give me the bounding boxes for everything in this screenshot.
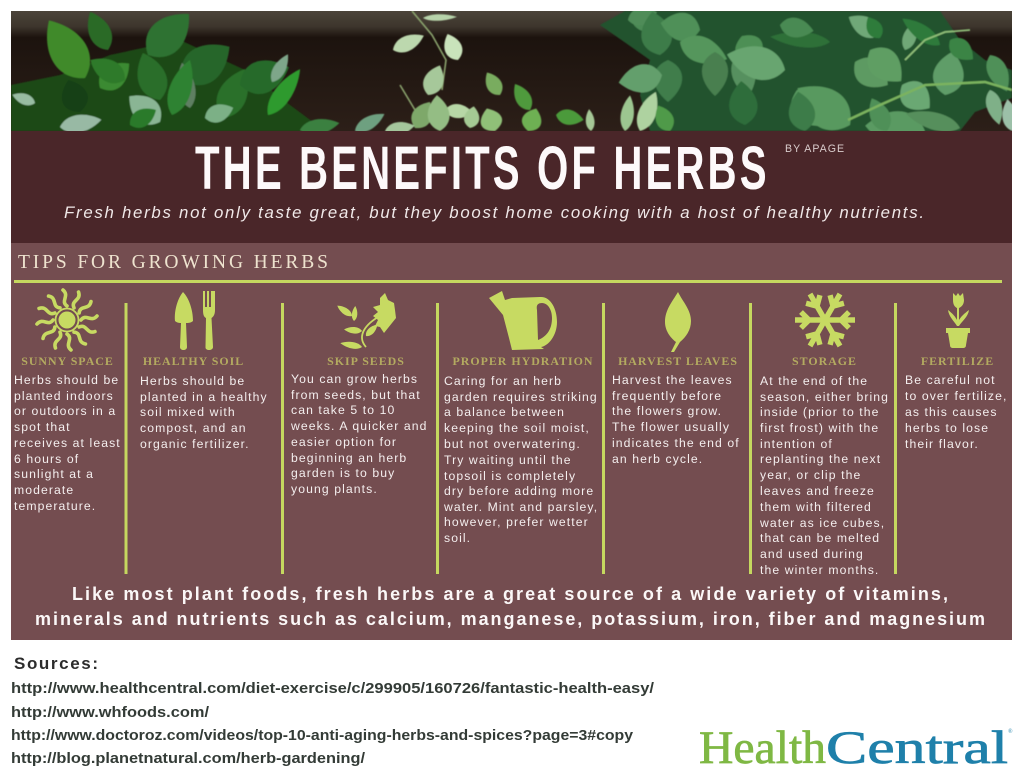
text: [612, 373, 740, 466]
text: herbs to lose: [905, 421, 989, 435]
photo banner: fresh herbs: [11, 11, 1012, 131]
text: [290, 372, 428, 496]
column: harvest leaves: [612, 292, 740, 466]
summary text: Like most plant foods, fresh herbs are a great source of a wide variety of vitamins,: [72, 584, 948, 604]
logo: HealthCentral: [699, 722, 1013, 774]
text: inside (prior to the: [760, 405, 880, 419]
text: from seeds, but that: [291, 388, 421, 402]
right catnip mass: [600, 11, 1012, 131]
text: year, or clip the: [760, 468, 861, 482]
logo: HealthCentral: Health: [699, 722, 826, 774]
text: a balance between: [444, 405, 565, 419]
sources list: http://www.whfoods.com/: [11, 704, 210, 721]
text: garden requires striking: [444, 390, 598, 404]
text: can take 5 to 10: [291, 403, 395, 417]
label: STORAGE: [792, 354, 857, 368]
text: Be careful not: [905, 373, 996, 387]
sources list: http://www.doctoroz.com/videos/top-10-anti-aging-herbs-and-spices?page=3#copy: [11, 727, 634, 744]
text: leaves and freeze: [760, 484, 875, 498]
text: dry before adding more: [444, 484, 594, 498]
text: compost, and an: [140, 421, 247, 435]
icon: leaf: [665, 292, 691, 352]
text: soil mixed with: [140, 405, 236, 419]
text: to over fertilize,: [905, 389, 1007, 403]
logo: HealthCentral: Central: [826, 722, 1008, 774]
text: however, prefer wetter: [444, 515, 589, 529]
text: 6 hours of: [14, 452, 79, 466]
label: FERTILIZE: [921, 354, 994, 368]
text: them with filtered: [760, 500, 872, 514]
text: easier option for: [291, 435, 397, 449]
text: [14, 373, 121, 513]
text: intention of: [760, 437, 833, 451]
column: fertilize: [905, 293, 1007, 451]
middle sprigs: [352, 11, 595, 137]
text: first frost) with the: [760, 421, 879, 435]
logo: HealthCentral: ®: [1008, 728, 1013, 735]
sources list: http://blog.planetnatural.com/herb-gardening/: [11, 750, 366, 767]
summary text: [35, 584, 985, 629]
label: HEALTHY SOIL: [143, 354, 244, 368]
column: skip seeds: [290, 293, 428, 496]
icon: sun: [37, 290, 97, 350]
text: weeks. A quicker and: [290, 419, 428, 433]
icon: potted tulip: [946, 293, 970, 348]
text: and used during: [760, 547, 864, 561]
label: SUNNY SPACE: [21, 354, 114, 368]
text: spot that: [14, 420, 71, 434]
text: The flower usually: [612, 420, 730, 434]
text: At the end of the: [760, 374, 868, 388]
text: sunlight at a: [14, 467, 94, 481]
label: PROPER HYDRATION: [453, 354, 593, 368]
text: temperature.: [14, 499, 96, 513]
text: replanting the next: [760, 452, 881, 466]
text: an herb cycle.: [612, 452, 703, 466]
text: [759, 374, 889, 577]
text: water. Mint and parsley,: [443, 500, 598, 514]
tips panel: [11, 243, 1012, 640]
text: the winter months.: [760, 563, 879, 577]
icon: trowel and fork: [175, 291, 215, 350]
text: [140, 374, 268, 451]
text: soil.: [444, 531, 471, 545]
text: indicates the end of: [612, 436, 740, 450]
title panel: [11, 131, 1012, 243]
text: their flavor.: [905, 437, 979, 451]
text: water as ice cubes,: [759, 516, 885, 530]
text: young plants.: [291, 482, 378, 496]
section heading: TIPS FOR GROWING HERBS: [18, 252, 328, 273]
byline: BY APAGE: [785, 143, 845, 155]
text: season, either bring: [760, 390, 889, 404]
text: [905, 373, 1007, 451]
label: SKIP SEEDS: [327, 354, 405, 368]
text: or outdoors in a: [14, 404, 116, 418]
left mint cluster: [11, 12, 340, 131]
text: Caring for an herb: [444, 374, 562, 388]
text: [443, 374, 598, 545]
sources list: http://www.healthcentral.com/diet-exercise/c/299905/160726/fantastic-health-easy/: [11, 680, 655, 697]
text: Herbs should be: [140, 374, 245, 388]
text: moderate: [14, 483, 74, 497]
text: Try waiting until the: [444, 453, 572, 467]
text: the flowers grow.: [612, 404, 722, 418]
column: healthy soil: [140, 291, 268, 451]
text: Herbs should be: [14, 373, 119, 387]
text: planted in a healthy: [140, 390, 268, 404]
label: HARVEST LEAVES: [618, 354, 738, 368]
column: storage: [759, 290, 889, 577]
text: Harvest the leaves: [612, 373, 733, 387]
text: You can grow herbs: [291, 372, 418, 386]
text: keeping the soil moist,: [444, 421, 590, 435]
text: as this causes: [905, 405, 998, 419]
text: that can be melted: [760, 531, 880, 545]
sources heading: Sources:: [14, 654, 98, 673]
text: planted indoors: [14, 389, 114, 403]
text: frequently before: [612, 389, 722, 403]
text: topsoil is completely: [444, 469, 576, 483]
subtitle: Fresh herbs not only taste great, but they boost home cooking with a host of healthy nutrients.: [64, 203, 924, 222]
column: sunny space: [14, 290, 121, 513]
summary text: minerals and nutrients such as calcium, manganese, potassium, iron, fiber and magnesium: [35, 609, 985, 629]
icon: snowflake: [795, 290, 855, 350]
text: but not overwatering.: [444, 437, 581, 451]
title: THE BENEFITS OF HERBS: [195, 134, 767, 202]
text: beginning an herb: [291, 451, 407, 465]
icon: watering can: [489, 291, 557, 350]
sources list: [11, 680, 655, 767]
text: receives at least: [14, 436, 121, 450]
text: garden is to buy: [291, 466, 395, 480]
text: organic fertilizer.: [140, 437, 250, 451]
icon: flower sprig: [335, 293, 396, 350]
column: proper hydration: [443, 291, 598, 545]
